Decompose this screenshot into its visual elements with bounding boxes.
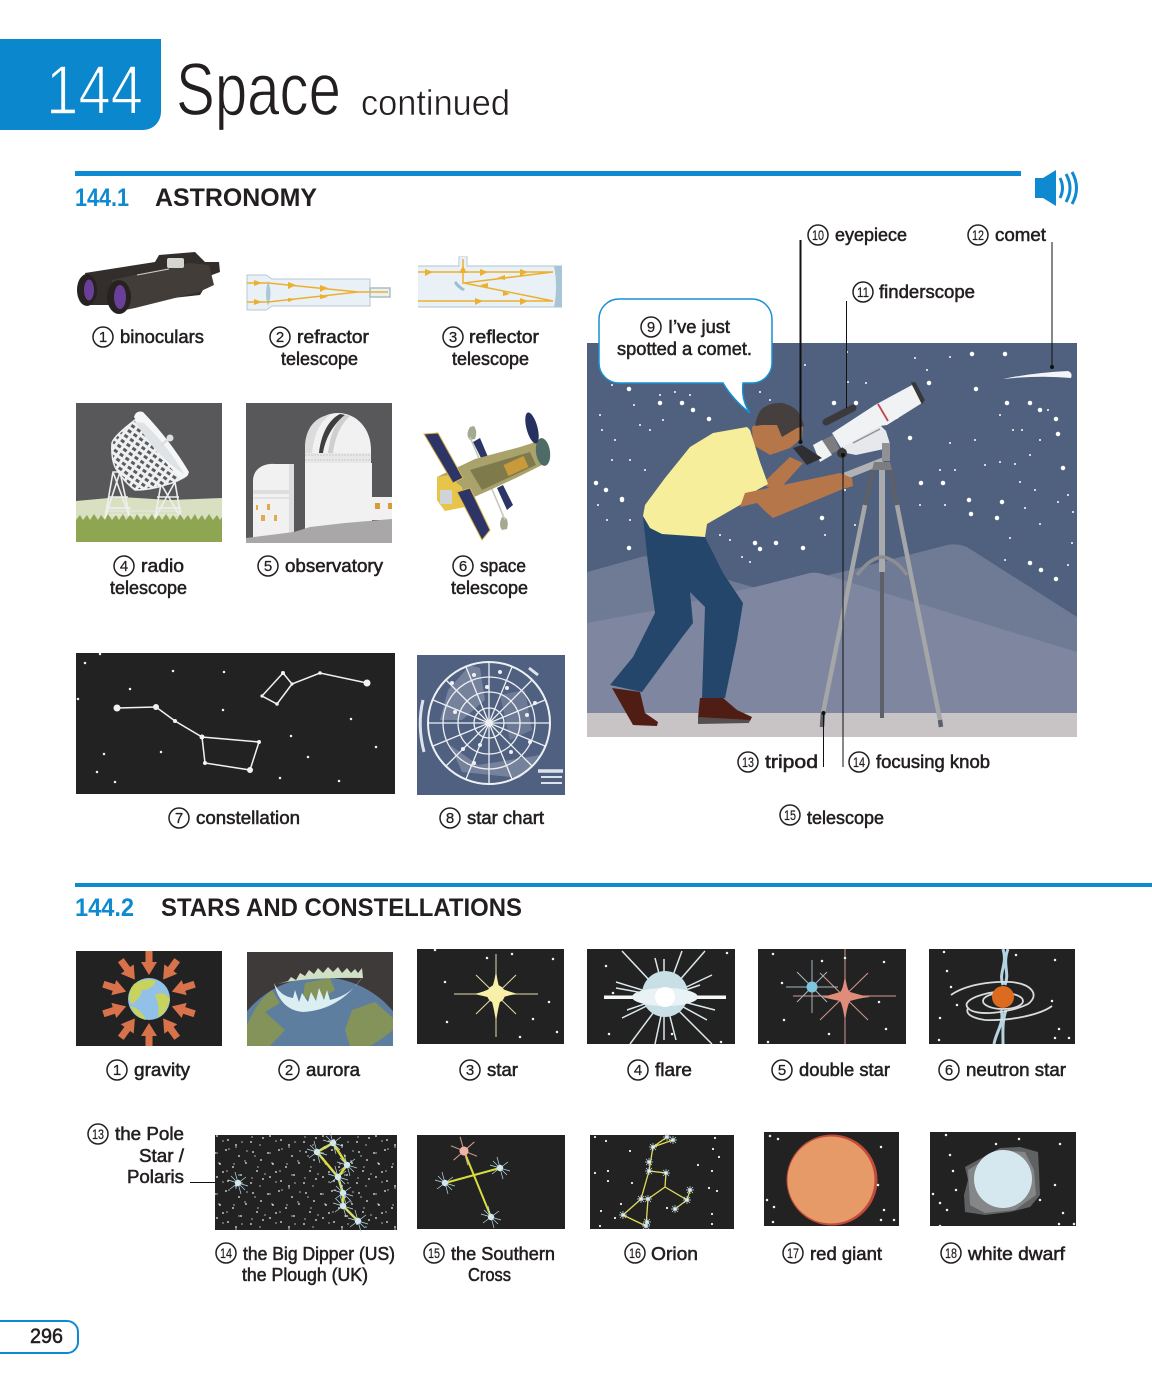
label: finderscope: 11 (857, 285, 869, 300)
label: star chart: star chart (467, 807, 544, 828)
illustration: gravity (76, 951, 222, 1047)
label: observatory: observatory (285, 555, 384, 576)
label: telescope (780, 805, 884, 828)
label: gravity: gravity (134, 1059, 191, 1080)
label: space telescope: 6 (459, 558, 467, 575)
diagram: reflector telescope (418, 257, 562, 307)
leader lines (798, 240, 1054, 767)
label: constellation: 7 (175, 810, 183, 827)
label: tripod: 13 (742, 755, 754, 770)
label: radio telescope: telescope (110, 577, 187, 598)
chart: constellation (76, 653, 395, 794)
label: observatory: 5 (264, 558, 272, 575)
label: star: 3 (466, 1062, 474, 1079)
illustration: observatory (246, 403, 392, 543)
illustration: the Southern Cross (417, 1135, 565, 1229)
label: aurora: 2 (285, 1062, 293, 1079)
title: Space (176, 48, 341, 131)
illustration: neutron star (929, 949, 1075, 1044)
label: binoculars: 1 (99, 329, 107, 346)
illustration: red giant (764, 1132, 899, 1226)
chapter number tab (0, 39, 161, 130)
label: radio telescope: radio (141, 555, 184, 576)
label: double star: 5 (778, 1062, 786, 1079)
person (610, 403, 853, 726)
page number (0, 1321, 78, 1353)
chapter number tab: 144 (46, 51, 143, 129)
night sky (587, 343, 1077, 737)
label: Orion: Orion (651, 1243, 698, 1264)
label: gravity (107, 1059, 191, 1080)
speech bubble: spotted a comet. (617, 338, 752, 359)
speech bubble: 9 (647, 319, 655, 336)
illustration: space telescope (424, 411, 552, 540)
label: telescope: 15 (784, 808, 796, 823)
label: flare (628, 1059, 692, 1080)
icon: audio speaker (1035, 170, 1076, 206)
label: white dwarf: 18 (945, 1246, 957, 1261)
title: continued (361, 82, 510, 123)
label: reflector telescope: reflector (469, 326, 539, 347)
speech bubble (599, 299, 772, 413)
label: focusing knob: 14 (853, 755, 865, 770)
chart: star chart (417, 655, 565, 795)
ground (587, 713, 1077, 737)
label: the Southern Cross: the Southern (451, 1243, 555, 1264)
comet (1003, 371, 1072, 379)
label: aurora: aurora (306, 1059, 361, 1080)
label: radio telescope (110, 555, 187, 598)
label: refractor telescope: refractor (297, 326, 369, 347)
illustration: white dwarf (930, 1132, 1076, 1226)
label: eyepiece: eyepiece (835, 224, 907, 245)
illustration: the Big Dipper (215, 1132, 397, 1232)
label: refractor telescope: telescope (281, 348, 358, 369)
telescope (793, 383, 924, 465)
label: comet: comet (995, 224, 1046, 245)
label: the Southern Cross: Cross (468, 1264, 511, 1285)
page number: 296 (30, 1325, 63, 1348)
label: eyepiece: 10 (812, 228, 824, 243)
label: neutron star: 6 (945, 1062, 953, 1079)
label: radio telescope: 4 (120, 558, 128, 575)
title (176, 48, 510, 131)
label: finderscope: finderscope (879, 281, 975, 302)
label: aurora (279, 1059, 361, 1080)
label: reflector telescope (443, 326, 539, 369)
label: reflector telescope: telescope (452, 348, 529, 369)
label: comet: 12 (972, 228, 984, 243)
section heading: stars and constellations: 144.2 (75, 894, 134, 922)
label: gravity: 1 (113, 1062, 121, 1079)
label: space telescope: telescope (451, 577, 528, 598)
illustration: flare (587, 949, 735, 1044)
label: star: star (487, 1059, 518, 1080)
label: space telescope (451, 555, 528, 598)
label: red giant: 17 (787, 1246, 799, 1261)
label: flare: flare (655, 1059, 692, 1080)
label: white dwarf: white dwarf (967, 1243, 1066, 1264)
label: refractor telescope: 2 (276, 329, 284, 346)
label: the Big Dipper / the Plough: 14 (220, 1246, 232, 1261)
sky stars (596, 352, 1073, 579)
label: the Pole Star / Polaris: 13 (92, 1127, 104, 1142)
label: the Pole Star / Polaris (88, 1123, 215, 1187)
section heading: astronomy: 144.1 (75, 184, 129, 212)
label: reflector telescope: 3 (449, 329, 457, 346)
illustration: double star (758, 949, 906, 1044)
label: the Southern Cross: 15 (428, 1246, 440, 1261)
label: star (460, 1059, 518, 1080)
label: binoculars: binoculars (120, 326, 204, 347)
section heading: astronomy (75, 184, 317, 212)
illustration: binoculars (77, 252, 220, 314)
label: double star: double star (799, 1059, 890, 1080)
label: flare: 4 (634, 1062, 642, 1079)
illustration: radio telescope (76, 403, 224, 542)
label: tripod: tripod (765, 751, 818, 772)
label: telescope: telescope (807, 807, 884, 828)
section heading: astronomy: ASTRONOMY (155, 184, 317, 212)
label: the Big Dipper / the Plough (216, 1243, 395, 1285)
label: comet (968, 224, 1046, 245)
label: the Southern Cross (424, 1243, 555, 1285)
illustration: star (417, 949, 564, 1044)
illustration: aurora (247, 952, 393, 1046)
illustration: Orion (590, 1133, 734, 1230)
label: constellation: constellation (196, 807, 300, 828)
section heading: stars and constellations: STARS AND CONSTELLATIONS (161, 894, 522, 922)
label: refractor telescope (270, 326, 369, 369)
label: tripod (738, 751, 818, 772)
label: space telescope: space (480, 555, 526, 576)
label: the Pole Star / Polaris: Star / (139, 1145, 185, 1166)
mountains (587, 544, 1077, 713)
label: the Big Dipper / the Plough: the Plough (UK) (242, 1264, 368, 1285)
label: neutron star: neutron star (966, 1059, 1066, 1080)
label: the Big Dipper / the Plough: the Big Dipper (US) (243, 1243, 395, 1264)
label: red giant: red giant (810, 1243, 882, 1264)
label: Orion (625, 1243, 698, 1264)
tripod (822, 461, 941, 727)
illustration: astronomer with telescope (587, 343, 1077, 737)
diagram: refractor telescope (247, 275, 390, 310)
label: the Pole Star / Polaris: the Pole (115, 1123, 184, 1144)
label: focusing knob: focusing knob (876, 751, 990, 772)
label: star chart: 8 (446, 810, 454, 827)
label: the Pole Star / Polaris: Polaris (127, 1166, 184, 1187)
label: Orion: 16 (629, 1246, 641, 1261)
speech bubble: I’ve just (668, 316, 730, 337)
